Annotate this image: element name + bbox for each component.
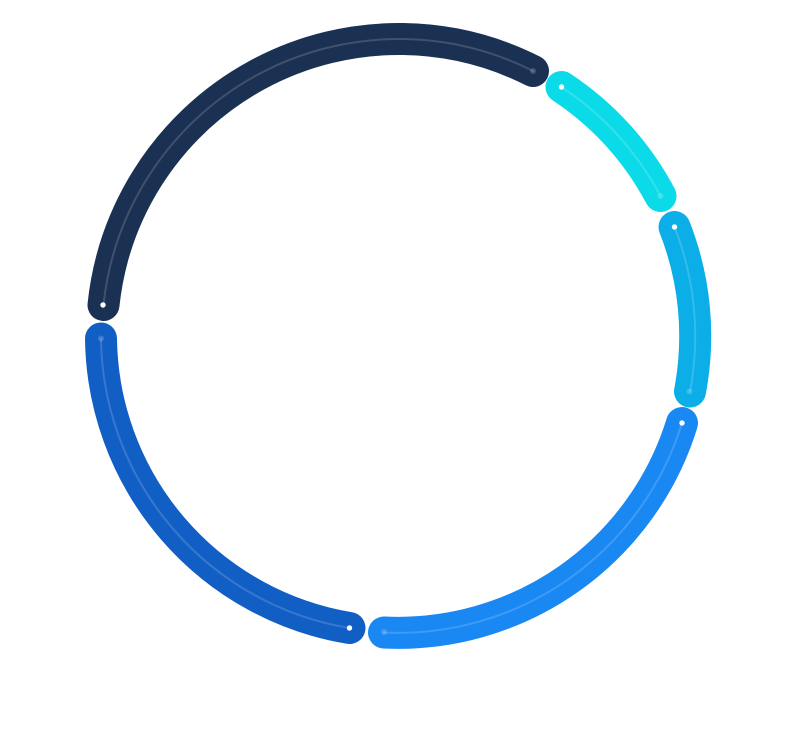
- segment: bright blue: [381, 420, 685, 635]
- segment: sky blue: [672, 224, 695, 394]
- segment: cyan: [559, 84, 664, 199]
- segment: royal blue: [98, 336, 352, 631]
- segment: navy: [100, 39, 536, 308]
